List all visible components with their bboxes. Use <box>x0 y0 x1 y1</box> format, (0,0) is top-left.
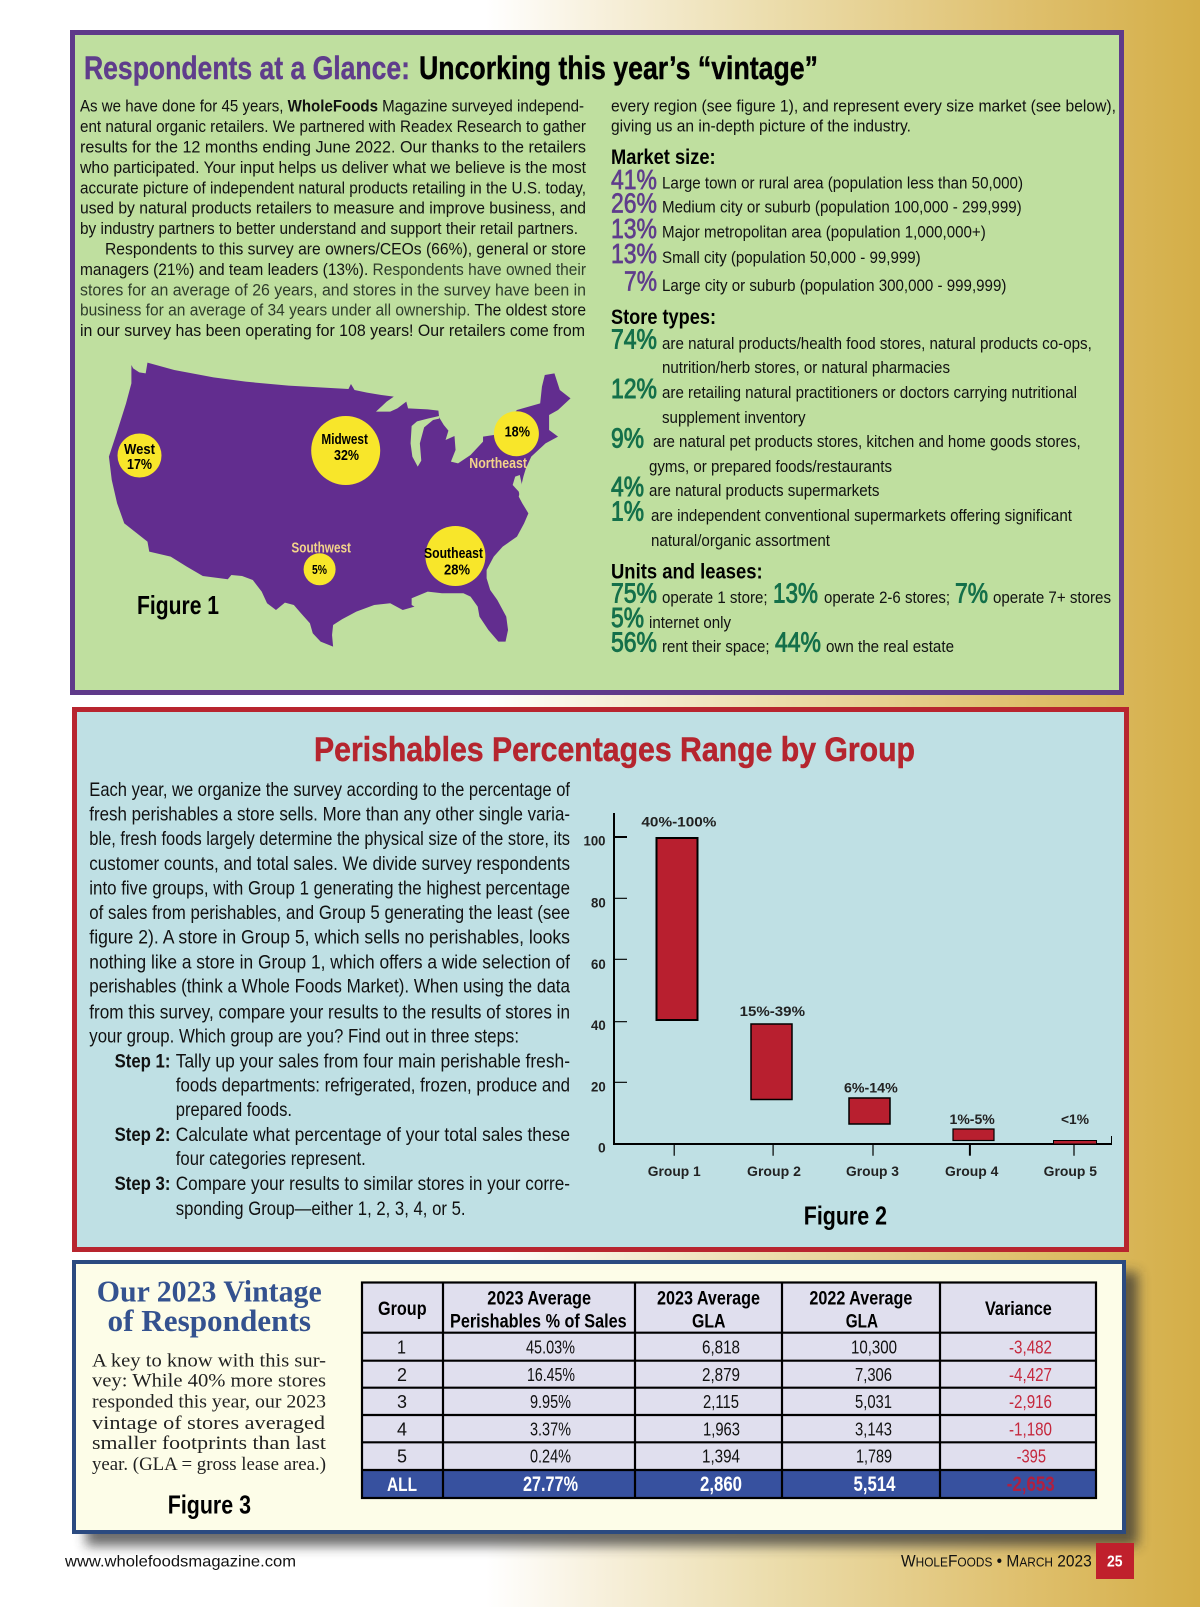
table header row: GLA <box>692 1311 726 1332</box>
market size list <box>611 145 1023 297</box>
bubble: Northeast 18%: Northeast <box>469 455 527 472</box>
text block: three steps <box>115 1050 570 1220</box>
table row: all groups <box>387 1473 1055 1496</box>
bar: group 3, 6%-14%: 6%-14% <box>844 1081 898 1096</box>
bubble: West 17% <box>118 434 162 478</box>
store types list: natural/organic assortment <box>651 531 830 550</box>
store types list <box>611 305 1092 550</box>
panel: respondents at a glance <box>72 32 1122 692</box>
units and leases list: 75% <box>611 578 657 609</box>
text block: introduction left column: ent natural organic retailers. We partnered with Readex Research to gather <box>80 117 586 136</box>
bubble: Midwest 32%: Midwest <box>321 431 368 448</box>
units and leases list: operate 7+ stores <box>993 588 1111 607</box>
table header row: Perishables % of Sales <box>450 1311 627 1332</box>
table row: group 5: -395 <box>1017 1446 1046 1466</box>
table row: all groups: 5,514 <box>854 1473 896 1496</box>
bubble: Midwest 32% <box>311 416 380 485</box>
market size list: 7% <box>624 266 657 297</box>
footer: website url: www.wholefoodsmagazine.com <box>64 1554 296 1571</box>
store types list: are natural products/health food stores, natural products co-ops, <box>662 334 1092 353</box>
bar: group 3, 6%-14% <box>844 1081 898 1124</box>
market size list: 13% <box>611 238 657 269</box>
caption: figure 3: Figure 3 <box>168 1489 251 1519</box>
market size list: Large town or rural area (population less than 50,000) <box>662 174 1023 193</box>
y axis labels: 0 <box>598 1141 606 1156</box>
table row: group 2: 7,306 <box>855 1365 892 1385</box>
table row: group 3 <box>397 1392 1052 1412</box>
bubble: Northeast 18% <box>469 411 539 472</box>
bubble: West 17%: West <box>124 441 155 458</box>
bubble: Southeast 28%: 28% <box>444 561 470 578</box>
store types list: Store types: <box>611 305 716 329</box>
text block: three steps: four categories represent. <box>176 1148 366 1170</box>
text block: introduction left column: stores for an average of 26 years, and stores in the survey have been in <box>80 280 586 299</box>
text block: grouping explanation: Each year, we organize the survey according to the percentage of <box>89 779 570 801</box>
table row: group 3: 5,031 <box>855 1392 892 1412</box>
bubble: Midwest 32%: 32% <box>334 447 359 464</box>
units and leases list: 44% <box>775 627 821 658</box>
text block: introduction left column: Respondents to this survey are owners/CEOs (66%), general or store <box>105 240 586 258</box>
table row: group 2: -4,427 <box>1009 1365 1052 1385</box>
text block: three steps: Step 1: <box>115 1050 170 1072</box>
text block: key to know: vey: While 40% more stores <box>92 1372 326 1392</box>
x axis group labels <box>648 1164 1097 1179</box>
y axis labels: 20 <box>591 1080 606 1095</box>
units and leases list: 13% <box>773 578 818 609</box>
text block: introduction left column: managers (21%) and team leaders (13%). Respondents have owned their <box>80 260 586 279</box>
text block: three steps: Tally up your sales from four main perishable fresh- <box>176 1050 570 1072</box>
units and leases list <box>611 560 1111 658</box>
bar: group 4, 1%-5% <box>950 1112 995 1140</box>
figure 2: floating bar chart <box>584 813 1112 1230</box>
bar: group 2, 15%-39%: 15%-39% <box>740 1004 805 1019</box>
text block: key to know: vintage of stores averaged <box>92 1414 326 1434</box>
units and leases list: 56% <box>611 627 657 658</box>
table header row: 2023 Average <box>487 1288 591 1309</box>
market size list: Small city (population 50,000 - 99,999) <box>662 248 921 267</box>
store types list: are natural products supermarkets <box>649 481 879 500</box>
footer: publication and date: WHOLEFOODS • MARCH 2023 <box>901 1552 1092 1571</box>
table row: group 1: -3,482 <box>1009 1337 1052 1357</box>
bar: group 4, 1%-5%: 1%-5% <box>950 1112 995 1127</box>
x axis group labels: Group 5 <box>1044 1164 1097 1179</box>
store types list: are independent conventional supermarkets offering significant <box>651 506 1072 525</box>
y axis labels <box>584 834 606 1156</box>
bubble: Southwest 5%: Southwest <box>291 540 351 557</box>
text block: grouping explanation <box>89 779 571 1047</box>
text block: introduction left column: results for the 12 months ending June 2022. Our thanks to the retailers <box>80 138 586 156</box>
units and leases list: operate 1 store; <box>662 588 768 607</box>
store types list: 74% <box>611 324 657 355</box>
units and leases list: own the real estate <box>826 637 954 656</box>
table row: group 5: 0.24% <box>530 1446 571 1466</box>
table row: group 5: 5 <box>397 1446 407 1466</box>
heading: respondents at a glance: Respondents at a Glance: <box>84 50 410 86</box>
panel frame: red border, light blue fill <box>74 710 1126 1250</box>
store types list: nutrition/herb stores, or natural pharmacies <box>662 358 950 377</box>
text block: grouping explanation: nothing like a store in Group 1, which offers a wide selection of <box>89 951 571 973</box>
table row: group 4: 3,143 <box>855 1419 892 1439</box>
heading: our 2023 vintage of respondents: of Respondents <box>108 1303 311 1338</box>
chart axes and ticks <box>613 813 1112 1156</box>
drop shadow of vintage panel <box>86 1272 1138 1546</box>
heading: respondents at a glance: Uncorking this year’s “vintage” <box>419 50 818 86</box>
table row: group 4 <box>397 1419 1052 1439</box>
text block: introduction left column: business for an average of 34 years under all ownership. The oldest store <box>80 301 586 320</box>
table row: group 4: -1,180 <box>1009 1419 1052 1439</box>
caption: figure 2: Figure 2 <box>804 1200 887 1230</box>
text block: three steps: Calculate what percentage of your total sales these <box>176 1124 570 1146</box>
y axis labels: 40 <box>591 1018 606 1033</box>
table row: group 3: 2,115 <box>703 1392 739 1412</box>
x axis group labels: Group 1 <box>648 1164 701 1179</box>
y axis labels: 80 <box>591 896 606 911</box>
table row: group 5: 1,394 <box>702 1446 740 1466</box>
table row: group 2: 2,879 <box>702 1365 740 1385</box>
text block: grouping explanation: your group. Which group are you? Find out in three steps: <box>89 1025 519 1047</box>
bubble: Southwest 5%: 5% <box>312 562 327 577</box>
text block: grouping explanation: from this survey, compare your results to the results of stores in <box>89 1001 570 1023</box>
bubble: Southeast 28%: Southeast <box>424 545 483 562</box>
text block: grouping explanation: ble, fresh foods largely determine the physical size of the store, its <box>89 828 570 850</box>
store types list: gyms, or prepared foods/restaurants <box>649 457 892 476</box>
table row: group 1 <box>397 1337 1052 1357</box>
table row: all groups: 27.77% <box>523 1473 578 1496</box>
table header row <box>378 1288 1052 1332</box>
bar: group 1, 40%-100% <box>641 815 716 1020</box>
bar: group 1, 40%-100%: 40%-100% <box>641 815 716 830</box>
text block: grouping explanation: of sales from perishables, and Group 5 generating the least (see <box>89 902 570 924</box>
market size list: Major metropolitan area (population 1,000,000+) <box>662 223 986 242</box>
store types list: 4% <box>611 471 644 502</box>
table header row: GLA <box>846 1311 878 1332</box>
text block: three steps: Compare your results to similar stores in your corre- <box>176 1173 570 1195</box>
text block: key to know <box>92 1352 327 1475</box>
text block: three steps: prepared foods. <box>176 1099 292 1121</box>
table row: group 5: 1,789 <box>856 1446 892 1466</box>
text block: three steps: Step 3: <box>115 1173 170 1195</box>
store types list: 9% <box>611 422 644 453</box>
bar: group 5, under 1%: <1% <box>1061 1112 1089 1127</box>
text block: key to know: smaller footprints than last <box>92 1434 327 1454</box>
store types list: 12% <box>611 373 657 404</box>
text block: grouping explanation: customer counts, and total sales. We divide survey respondents <box>89 853 570 875</box>
text block: three steps: Step 2: <box>115 1124 170 1146</box>
footer: page number box <box>1096 1543 1134 1579</box>
market size list: Market size: <box>611 145 716 169</box>
text block: key to know: A key to know with this sur- <box>92 1352 326 1372</box>
heading: perishables percentages range by group: Perishables Percentages Range by Group <box>314 731 915 769</box>
text block: key to know: year. (GLA = gross lease area.) <box>92 1455 326 1475</box>
x axis group labels: Group 4 <box>945 1164 999 1179</box>
panel: perishables percentages <box>74 710 1126 1250</box>
table row: all groups: -2,653 <box>1007 1473 1055 1496</box>
heading: our 2023 vintage of respondents <box>97 1274 322 1338</box>
market size list: Medium city or suburb (population 100,000 - 299,999) <box>662 198 1022 216</box>
text block: introduction right column: every region (see figure 1), and represent every size market (see below), <box>611 96 1116 115</box>
heading: respondents at a glance <box>84 50 818 86</box>
bubble: Northeast 18%: 18% <box>505 424 530 441</box>
units and leases list: rent their space; <box>662 637 770 656</box>
table row: group 4: 1,963 <box>703 1419 740 1439</box>
panel: our 2023 vintage of respondents <box>74 1262 1124 1532</box>
heading: our 2023 vintage of respondents: Our 2023 Vintage <box>97 1274 322 1309</box>
table row: group 1: 6,818 <box>702 1337 740 1357</box>
table row: group 4: 3.37% <box>530 1419 571 1439</box>
text block: grouping explanation: perishables (think a Whole Foods Market). When using the data <box>89 976 570 998</box>
text block: grouping explanation: fresh perishables a store sells. More than any other single varia- <box>89 804 570 826</box>
table row: group 3: -2,916 <box>1009 1392 1052 1412</box>
table header row: Variance <box>985 1299 1052 1320</box>
store types list: 1% <box>611 496 644 527</box>
table header row: 2023 Average <box>657 1288 760 1309</box>
table header row: Group <box>378 1299 427 1320</box>
text block: introduction left column: As we have done for 45 years, WholeFoods Magazine surveyed independ- <box>80 97 584 116</box>
x axis group labels: Group 2 <box>747 1164 801 1179</box>
table row: group 3: 3 <box>397 1392 407 1412</box>
table row: all groups: 2,860 <box>700 1473 742 1496</box>
units and leases list: Units and leases: <box>611 560 763 584</box>
text block: introduction left column <box>79 97 586 340</box>
text block: introduction left column: accurate picture of independent natural products retailing in the U.S. today, <box>80 178 586 197</box>
units and leases list: operate 2-6 stores; <box>824 588 950 607</box>
y axis labels: 60 <box>591 957 606 972</box>
text block: introduction right column <box>611 96 1116 136</box>
market size list: 13% <box>611 213 657 244</box>
text block: three steps: foods departments: refrigerated, frozen, produce and <box>176 1074 570 1096</box>
figure 1: US map with regions <box>109 363 571 647</box>
panel frame: purple border, green fill <box>72 32 1122 692</box>
table row: all groups: ALL <box>387 1475 417 1496</box>
text block: key to know: responded this year, our 2023 <box>92 1393 326 1413</box>
table row: group 1: 45.03% <box>526 1337 575 1357</box>
bubble: Southeast 28% <box>424 526 485 586</box>
store types list: supplement inventory <box>662 408 806 427</box>
bar: group 5, under 1% <box>1054 1112 1096 1144</box>
table header row: 2022 Average <box>809 1288 912 1309</box>
text block: introduction right column: giving us an in-depth picture of the industry. <box>611 117 911 136</box>
bubble: West 17%: 17% <box>127 456 152 473</box>
text block: introduction left column: used by natural products retailers to measure and improve business, and <box>80 199 586 218</box>
units and leases list: 7% <box>955 578 988 609</box>
bar: group 2, 15%-39% <box>740 1004 805 1100</box>
table row: group 1: 1 <box>397 1337 406 1357</box>
table row: group 3: 9.95% <box>530 1392 571 1412</box>
market size list: 41% <box>611 164 657 195</box>
text block: grouping explanation: figure 2). A store in Group 5, which sells no perishables, looks <box>89 927 570 949</box>
bubble: Southwest 5% <box>291 540 351 585</box>
market size list: Large city or suburb (population 300,000 - 999,999) <box>662 276 1006 295</box>
text block: introduction left column: who participated. Your input helps us deliver what we believe is the most <box>79 158 586 177</box>
table row: group 2 <box>397 1365 1052 1385</box>
store types list: are retailing natural practitioners or doctors carrying nutritional <box>662 383 1077 402</box>
map: purple US outline <box>109 363 571 647</box>
caption: figure 1: Figure 1 <box>137 590 219 620</box>
y axis labels: 100 <box>584 834 606 849</box>
x axis group labels: Group 3 <box>846 1164 899 1179</box>
table: GLA by group <box>362 1282 1096 1498</box>
table row: group 2: 2 <box>397 1365 407 1385</box>
text block: three steps: sponding Group—either 1, 2, 3, 4, or 5. <box>176 1198 466 1220</box>
panel frame: navy border, cream fill <box>74 1262 1124 1532</box>
table row: group 2: 16.45% <box>527 1365 575 1385</box>
units and leases list: internet only <box>649 613 731 632</box>
store types list: are natural pet products stores, kitchen and home goods stores, <box>653 432 1081 451</box>
text block: introduction left column: by industry partners to better understand and support their retail partners. <box>80 219 578 238</box>
table row: group 1: 10,300 <box>851 1337 897 1357</box>
table row: group 4: 4 <box>397 1419 407 1439</box>
units and leases list: 5% <box>611 602 644 633</box>
text block: introduction left column: in our survey has been operating for 108 years! Our retailers come from <box>80 321 585 340</box>
footer: page number box: 25 <box>1107 1554 1123 1571</box>
text block: grouping explanation: into five groups, with Group 1 generating the highest percentage <box>89 877 570 899</box>
table row: group 5 <box>397 1446 1046 1466</box>
market size list: 26% <box>611 188 657 219</box>
